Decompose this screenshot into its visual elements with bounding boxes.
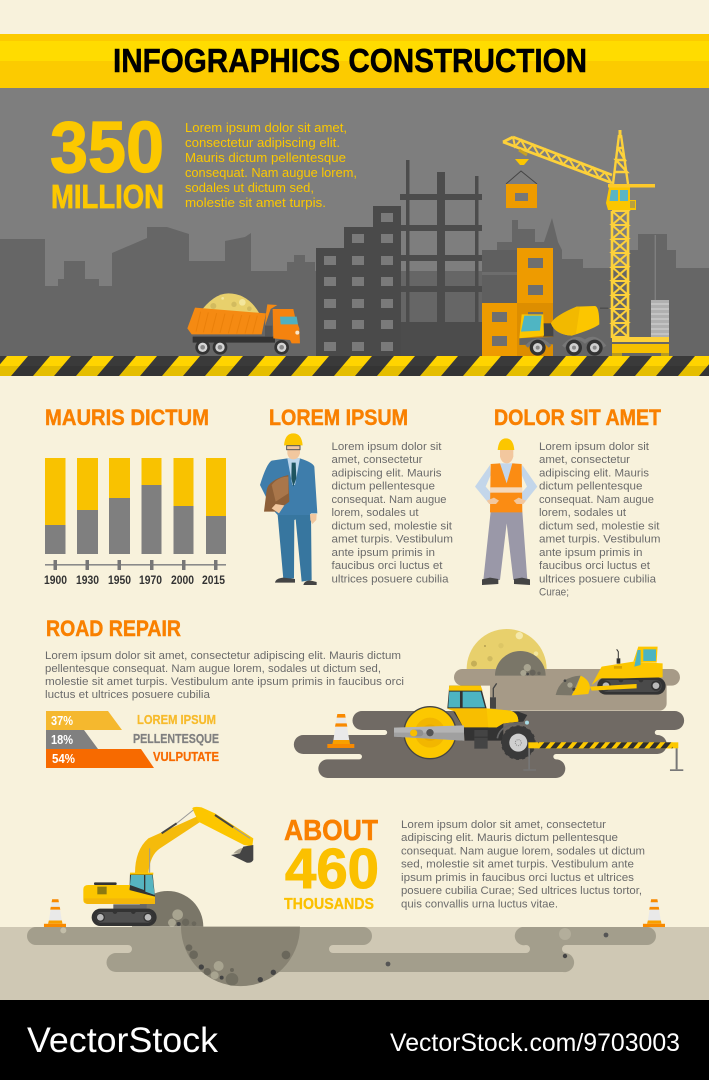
bulldozer <box>556 647 666 695</box>
text block <box>539 441 660 599</box>
percentage legend <box>46 711 219 768</box>
text block: intro <box>185 121 357 210</box>
text block: amet turpis. Vestibulum <box>539 534 660 546</box>
text block: about: ipsum primis in faucibus orci luctus et ultrices <box>401 872 635 884</box>
upper road <box>454 669 680 711</box>
excavator <box>83 807 253 926</box>
text block: dictum sed, molestie sit <box>332 520 452 532</box>
orange building under construction <box>482 248 553 356</box>
heading: LOREM IPSUM <box>269 405 408 430</box>
text block: intro: consequat. Nam augue lorem, <box>185 166 357 180</box>
text block: adipiscing elit. Mauris <box>539 468 650 480</box>
text block: amet, consectetur <box>539 454 630 466</box>
text block: ultrices posuere cubilia <box>332 574 449 586</box>
heading: ROAD REPAIR <box>46 616 181 641</box>
text block: about: Lorem ipsum dolor sit amet, consectetur <box>401 819 606 831</box>
text block: intro: Lorem ipsum dolor sit amet, <box>185 121 347 135</box>
percentage legend: 18% <box>51 732 73 747</box>
text block: consequat. Nam augue <box>332 494 446 506</box>
heading: MAURIS DICTUM <box>45 405 209 430</box>
text block: adipiscing elit. Mauris <box>332 468 442 480</box>
text block: dictum pellentesque <box>332 481 435 493</box>
text block: intro: consectetur adipiscing elit. <box>185 136 340 150</box>
text block: intro: sodales ut dictum sed, <box>185 181 314 195</box>
worker figure <box>475 438 537 585</box>
big number: about 460 thousands: THOUSANDS <box>284 896 374 913</box>
text block: about: adipiscing elit. Mauris dictum pellentesque <box>401 832 618 844</box>
percentage legend: PELLENTESQUE <box>133 732 219 746</box>
text block: about: sed, molestie sit amet turpis. Vestibulum ante <box>401 859 634 871</box>
text block: about: consequat. Nam augue lorem, sodales ut dictum <box>401 846 645 858</box>
footer bar: VectorStock <box>27 1021 219 1060</box>
title banner <box>0 34 709 88</box>
big number: 350 million: MILLION <box>51 178 164 215</box>
dark tower building <box>316 206 401 356</box>
title banner: INFOGRAPHICS CONSTRUCTION <box>113 42 587 79</box>
text block: molestie sit amet turpis. Vestibulum ante ipsum primis in faucibus orci <box>45 676 404 688</box>
road roller <box>394 683 535 759</box>
text block: lorem, sodales ut <box>332 507 418 519</box>
text block: intro: molestie sit amet turpis. <box>185 196 326 210</box>
icon: left traffic cone <box>44 899 66 927</box>
panel: city construction scene <box>0 88 709 356</box>
percentage legend: VULPUTATE <box>153 750 219 764</box>
text block: amet turpis. Vestibulum <box>332 534 453 546</box>
stacked bar chart: 1950 <box>108 573 131 587</box>
icon: right traffic cone <box>643 899 665 927</box>
text block: consequat. Nam augue <box>539 494 654 506</box>
stacked bar chart: 1900 <box>44 573 67 587</box>
footer bar <box>0 1000 709 1080</box>
barrier <box>523 742 683 771</box>
city skyline silhouette <box>0 218 709 356</box>
text block: luctus et ultrices posuere cubilia <box>45 689 211 701</box>
dirt pile <box>495 651 546 676</box>
stacked bar chart: 2015 <box>202 573 225 587</box>
stacked bar chart: 2000 <box>171 573 194 587</box>
text block: ante ipsum primis in <box>539 547 642 559</box>
text block: ultrices posuere cubilia <box>539 574 657 586</box>
text block: faucibus orci luctus et <box>332 560 442 572</box>
dump truck <box>187 293 300 355</box>
text block: faucibus orci luctus et <box>539 560 650 572</box>
text block: Curae; <box>539 587 569 599</box>
text block <box>45 650 404 701</box>
text block: about: posuere cubilia Curae; Sed ultrices luctus tortor, <box>401 885 642 897</box>
text block <box>332 441 453 586</box>
excavation pit <box>60 891 300 986</box>
text block: lorem, sodales ut <box>539 507 626 519</box>
text block: Lorem ipsum dolor sit <box>539 441 649 453</box>
panel: dolor sit amet worker <box>475 405 661 599</box>
stacked bar chart <box>44 458 226 587</box>
percentage legend: 54% <box>52 751 75 766</box>
panel: lorem ipsum engineer <box>260 405 453 586</box>
panel: road repair <box>45 616 684 778</box>
percentage legend: 37% <box>51 713 73 728</box>
heading: DOLOR SIT AMET <box>494 405 661 430</box>
text block: about <box>401 819 645 910</box>
hazard stripe road <box>0 356 709 376</box>
percentage legend: LOREM IPSUM <box>137 713 216 727</box>
text block: amet, consectetur <box>332 454 423 466</box>
lower road <box>294 711 684 778</box>
tower crane <box>503 130 669 356</box>
big number: about 460 thousands <box>284 815 379 913</box>
text block: dictum pellentesque <box>539 481 642 493</box>
text block: Lorem ipsum dolor sit amet, consectetur adipiscing elit. Mauris dictum <box>45 650 401 662</box>
text block: dictum sed, molestie sit <box>539 520 660 532</box>
icon: traffic cone <box>327 714 354 748</box>
footer bar: VectorStock.com/9703003 <box>390 1029 680 1057</box>
sand pile <box>467 629 547 669</box>
concrete mixer truck <box>519 306 608 356</box>
text block: ante ipsum primis in <box>332 547 435 559</box>
stacked bar chart: 1930 <box>76 573 99 587</box>
ground with excavation <box>0 891 709 1000</box>
road layers <box>27 927 656 972</box>
text block: Lorem ipsum dolor sit <box>332 441 442 453</box>
road repair scene <box>294 629 684 778</box>
panel: mauris dictum chart <box>44 405 226 587</box>
stacked bar chart: 1970 <box>139 573 162 587</box>
text block: about: quis convallis urna luctus vitae. <box>401 898 558 910</box>
big number: about 460 thousands: ABOUT <box>284 815 378 847</box>
text block: intro: Mauris dictum pellentesque <box>185 151 346 165</box>
engineer figure <box>260 433 317 585</box>
big number: 350 million: 350 <box>50 108 164 188</box>
text block: pellentesque consequat. Nam augue lorem, sodales ut dictum sed, <box>45 663 381 675</box>
big number: about 460 thousands: 460 <box>285 837 379 901</box>
scaffolding frame <box>400 160 482 356</box>
